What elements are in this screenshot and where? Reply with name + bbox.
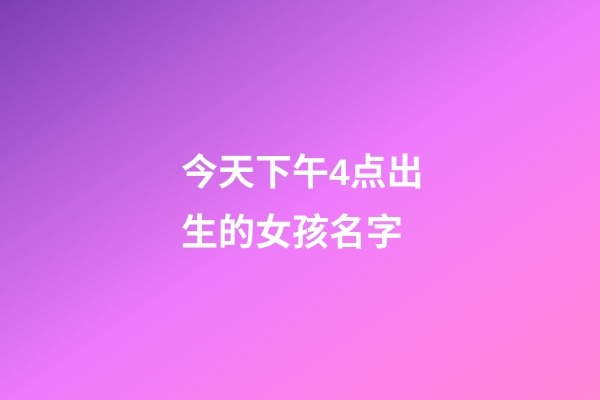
title: 今天下午4点出 bbox=[181, 152, 424, 193]
title bbox=[181, 152, 424, 253]
title: 生的女孩名字 bbox=[181, 212, 403, 253]
